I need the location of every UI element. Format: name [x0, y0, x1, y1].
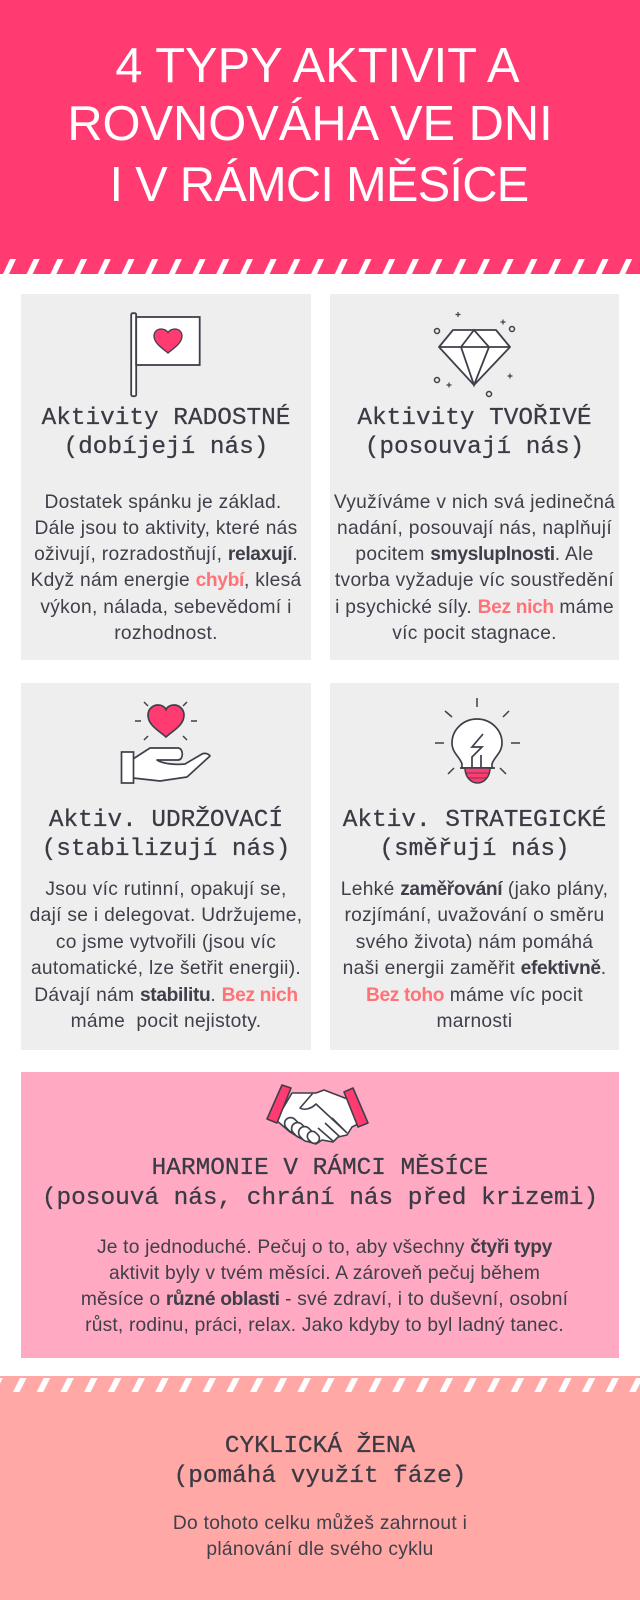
- text: cyklická žena: [173, 1513, 467, 1560]
- text: cyklická žena: Do tohoto celku můžeš zahrnout i: [173, 1513, 467, 1534]
- panel: cyklická žena: [0, 1376, 640, 1600]
- panel: tvořivé: [330, 294, 619, 660]
- text: udržovací: Dávají nám stabilitu. Bez nich: [34, 985, 298, 1006]
- icon: diamond: [434, 312, 516, 398]
- text: tvořivé: pocitem smysluplnosti. Ale: [355, 544, 594, 565]
- heading: strategické: Aktiv. STRATEGICKÉ: [343, 806, 606, 834]
- heading: harmonie: HARMONIE V RÁMCI MĚSÍCE: [152, 1155, 488, 1182]
- title: I V RÁMCI MĚSÍCE: [110, 158, 528, 212]
- heading: radostné: Aktivity RADOSTNÉ: [42, 404, 290, 432]
- text: harmonie: [81, 1236, 568, 1336]
- text: tvořivé: tvorba vyžaduje víc soustředění: [335, 570, 614, 591]
- text: strategické: naši energii zaměřit efektivně.: [343, 958, 606, 979]
- text: strategické: rozjímání, uvažování o směru: [344, 905, 605, 926]
- text: radostné: rozhodnost.: [114, 623, 218, 644]
- text: radostné: oživují, rozradostňují, relaxují.: [34, 544, 298, 565]
- heading: udržovací: Aktiv. UDRŽOVACÍ: [49, 806, 283, 834]
- text: udržovací: co jsme vytvořili (jsou víc: [56, 932, 276, 953]
- text: udržovací: [30, 878, 302, 1032]
- text: radostné: Dále jsou to aktivity, které nás: [34, 518, 298, 539]
- text: udržovací: dají se i delegovat. Udržujeme,: [30, 905, 302, 926]
- heading: cyklická žena: CYKLICKÁ ŽENA: [225, 1433, 415, 1460]
- text: strategické: [341, 878, 608, 1032]
- heading: udržovací: (stabilizují nás): [42, 836, 290, 863]
- text: strategické: marnosti: [436, 1011, 512, 1032]
- text: tvořivé: i psychické síly. Bez nich máme: [335, 597, 614, 618]
- icon: handshake: [266, 1084, 369, 1145]
- heading: strategické: [342, 806, 606, 863]
- heading: udržovací: [42, 806, 290, 863]
- text: strategické: Bez toho máme víc pocit: [366, 985, 583, 1006]
- text: harmonie: aktivit byly v tvém měsíci. A zároveň pečuj během: [109, 1263, 540, 1284]
- text: strategické: Lehké zaměřování (jako plány,: [341, 878, 608, 900]
- text: radostné: Když nám energie chybí, klesá: [30, 570, 302, 591]
- icon: hand with heart: [120, 702, 211, 784]
- text: tvořivé: [334, 492, 615, 644]
- stripes band: [0, 1378, 640, 1392]
- panel: udržovací: [21, 683, 311, 1050]
- heading: cyklická žena: (pomáhá využít fáze): [174, 1462, 466, 1490]
- title: [67, 39, 553, 212]
- title: 4 TYPY AKTIVIT A: [115, 39, 520, 93]
- panel: strategické: [330, 683, 619, 1050]
- text: tvořivé: víc pocit stagnace.: [392, 623, 557, 644]
- heading: radostné: (dobíjejí nás): [64, 434, 268, 461]
- heading: tvořivé: (posouvají nás): [365, 434, 584, 461]
- heading: cyklická žena: [174, 1432, 466, 1490]
- text: radostné: výkon, nálada, sebevědomí i: [40, 597, 292, 618]
- text: tvořivé: Využíváme v nich svá jedinečná: [334, 492, 615, 512]
- text: radostné: [30, 492, 302, 644]
- heading: tvořivé: [357, 404, 592, 461]
- panel: radostné: [21, 294, 311, 660]
- heading: harmonie: (posouvá nás, chrání nás před krizemi): [42, 1184, 598, 1212]
- heading: strategické: (směřují nás): [379, 836, 570, 863]
- icon: flag with heart: [130, 312, 201, 398]
- text: radostné: Dostatek spánku je základ.: [44, 492, 282, 512]
- panel: harmonie: [21, 1072, 619, 1358]
- heading: tvořivé: Aktivity TVOŘIVÉ: [357, 404, 592, 432]
- text: cyklická žena: plánování dle svého cyklu: [206, 1539, 434, 1560]
- text: udržovací: máme pocit nejistoty.: [71, 1011, 261, 1032]
- heading: radostné: [42, 404, 290, 461]
- text: harmonie: měsíce o různé oblasti - své zdraví, i to duševní, osobní: [81, 1289, 568, 1310]
- heading: harmonie: [42, 1154, 598, 1212]
- text: harmonie: Je to jednoduché. Pečuj o to, aby všechny čtyři typy: [97, 1236, 552, 1258]
- title: ROVNOVÁHA VE DNI: [67, 97, 553, 151]
- icon: light bulb: [435, 698, 520, 784]
- text: udržovací: Jsou víc rutinní, opakují se,: [45, 878, 287, 900]
- text: tvořivé: nadání, posouvají nás, naplňují: [337, 518, 612, 539]
- text: udržovací: automatické, lze šetřit energii).: [31, 958, 301, 979]
- text: harmonie: růst, rodinu, práci, relax. Jako kdyby to byl ladný tanec.: [85, 1315, 564, 1336]
- text: strategické: svého života) nám pomáhá: [356, 932, 593, 953]
- header band: [0, 0, 640, 274]
